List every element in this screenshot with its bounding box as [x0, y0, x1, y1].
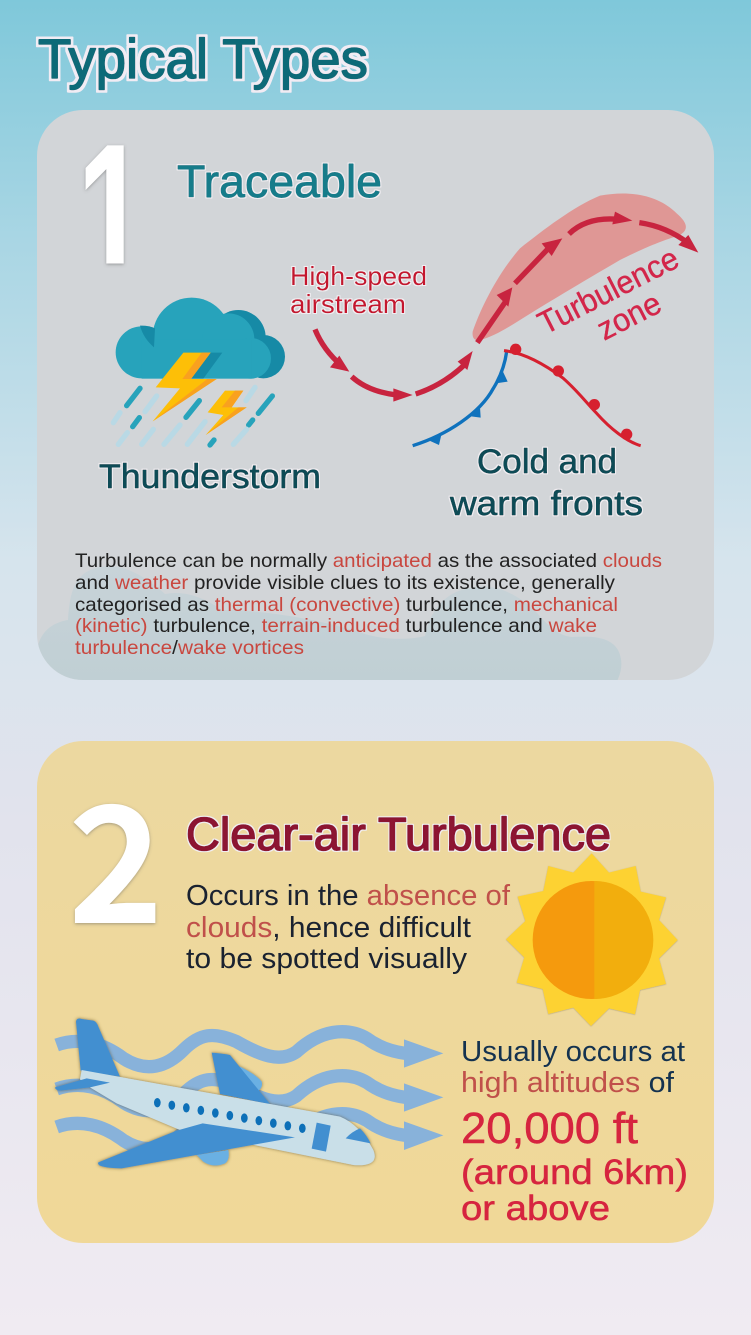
panel: traceable turbulence: [30, 101, 714, 690]
text: usually occurs at high altitudes: Usually occurs at: [461, 1036, 685, 1068]
airflow arrows: [57, 1032, 443, 1150]
text: occurs in the absence of clouds: Occurs in the absence of: [186, 880, 511, 912]
label: high-speed airstream: airstream: [290, 289, 406, 319]
text: usually occurs at high altitudes: [461, 1036, 685, 1099]
callout: 20,000 ft: (around 6km): [461, 1153, 688, 1192]
label: cold and warm fronts: warm fronts: [449, 485, 643, 523]
text: occurs in the absence of clouds: to be spotted visually: [186, 943, 468, 975]
description text: and weather provide visible clues to its existence, generally: [75, 572, 615, 594]
main title: Typical Types: [38, 27, 368, 90]
callout: 20,000 ft: 20,000 ft: [461, 1104, 638, 1153]
icon: thunderstorm cloud: [113, 298, 285, 445]
description text: turbulence /wake vortices: [75, 637, 304, 659]
text: occurs in the absence of clouds: [186, 880, 511, 975]
heading: traceable: Traceable: [177, 156, 382, 207]
label: turbulence zone: Turbulence: [532, 240, 685, 341]
panel background: [37, 110, 714, 680]
number 1: 1: [77, 101, 147, 328]
text: usually occurs at high altitudes: high altitudes of: [461, 1067, 675, 1099]
callout: 20,000 ft: [461, 1104, 688, 1228]
airstream arrows: [315, 219, 688, 395]
description text: categorised as thermal (convective) turbulence, mechanical: [75, 594, 618, 616]
description text: (kinetic) turbulence, terrain-induced turbulence and wake: [75, 615, 597, 637]
panel: clear-air turbulence: [37, 735, 714, 1243]
label: cold and warm fronts: Cold and: [477, 443, 617, 481]
label: thunderstorm: Thunderstorm: [99, 458, 321, 496]
label: high-speed airstream: High-speed: [290, 261, 427, 291]
callout: 20,000 ft: or above: [461, 1189, 610, 1228]
illustration: airplane in wavy airflow: [55, 1019, 443, 1168]
icon: sun: [506, 853, 678, 1026]
diagram: airstream, turbulence zone and fronts: [315, 193, 698, 446]
label: turbulence zone: zone: [591, 285, 667, 347]
airplane: [55, 1019, 375, 1168]
text: occurs in the absence of clouds: clouds, hence difficult: [186, 912, 471, 944]
description text: [75, 550, 662, 659]
turbulence zone shape: [473, 193, 686, 340]
heading: clear-air turbulence: Clear-air Turbulence: [186, 808, 611, 860]
watermark cloud: [30, 566, 621, 690]
warm front: [504, 351, 641, 446]
number 2: 2: [68, 735, 164, 970]
panel background: [37, 741, 714, 1243]
description text: Turbulence can be normally anticipated as the associated clouds: [75, 550, 662, 572]
cold front: [413, 352, 507, 446]
